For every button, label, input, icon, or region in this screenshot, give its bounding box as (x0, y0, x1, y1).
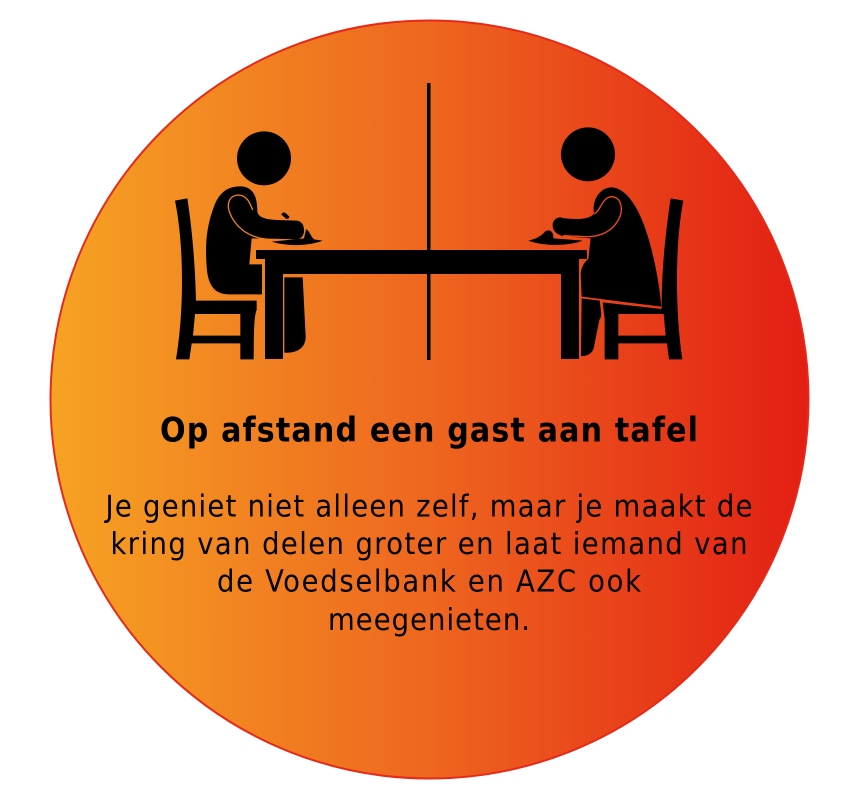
body text: meegenieten. (328, 603, 530, 638)
body text: de Voedselbank en AZC ook (217, 564, 641, 600)
title: Op afstand een gast aan tafel (160, 410, 698, 450)
body text: Je geniet niet alleen zelf, maar je maakt de (104, 490, 752, 524)
table (256, 250, 587, 359)
dividing line (427, 83, 430, 360)
body text (104, 490, 752, 638)
body text: kring van delen groter en laat iemand van (110, 527, 748, 562)
icon: right person at table (528, 127, 683, 359)
icon: left person at table (175, 131, 323, 359)
